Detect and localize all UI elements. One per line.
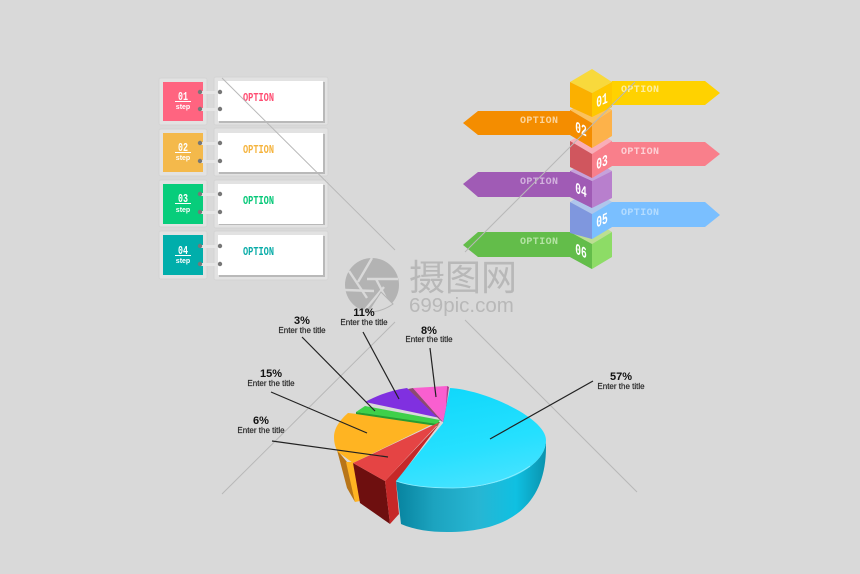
label: 57%: Enter the title: [597, 382, 645, 391]
option 02: [463, 98, 612, 148]
option 04: [463, 159, 612, 208]
step card 01: 01: [178, 90, 188, 104]
option 02: OPTION: [520, 116, 558, 127]
option 05: [570, 189, 720, 239]
watermark diagonal lines: [222, 78, 637, 494]
step card 03: step: [176, 207, 190, 214]
slice: orange 15%: [334, 413, 437, 502]
option 02: 02: [575, 119, 587, 141]
label: 57%: 57%: [610, 371, 632, 383]
leader lines: [271, 332, 593, 457]
step card 03: [159, 180, 328, 228]
3D pie chart: [334, 386, 546, 532]
slice: pink 8%: [413, 386, 449, 424]
label: 8%: Enter the title: [405, 335, 453, 344]
option 05: OPTION: [621, 208, 659, 219]
panel: isometric option stack: [463, 69, 720, 269]
label: 15%: Enter the title: [247, 379, 295, 388]
step card 04: [159, 231, 328, 280]
watermark aperture icon: [345, 258, 399, 312]
watermark chinese name: 摄图网: [409, 257, 517, 298]
step card 04: step: [176, 258, 190, 265]
label: 15%: [247, 368, 295, 388]
option 01: 01: [596, 90, 608, 112]
label: 8%: 8%: [421, 325, 437, 337]
option 03: [570, 129, 720, 178]
step card 01: OPTION: [243, 91, 274, 105]
step card 04: 04: [178, 244, 188, 258]
step card 01: [159, 77, 328, 125]
option 01: [570, 69, 720, 117]
label: 6%: 6%: [253, 415, 269, 427]
option 03: 03: [596, 152, 608, 174]
slice: green 3%: [356, 406, 440, 426]
label: 11%: [340, 307, 388, 327]
step card 02: 02: [178, 141, 188, 155]
slice: purple 11%: [365, 388, 443, 422]
label: 11%: 11%: [353, 307, 375, 319]
label: 3%: Enter the title: [278, 326, 326, 335]
step card 02: step: [176, 155, 190, 162]
step card 03: 03: [178, 192, 188, 206]
label: 3%: 3%: [294, 315, 310, 327]
option 04: 04: [575, 180, 587, 202]
panel: step cards: [159, 77, 328, 280]
step card 04: OPTION: [243, 245, 274, 259]
label: 6%: [237, 415, 285, 435]
watermark: [345, 257, 517, 317]
slice: cyan 57%: [396, 388, 546, 532]
watermark url: 699pic.com: [409, 294, 514, 317]
option 03: OPTION: [621, 147, 659, 158]
option 04: OPTION: [520, 177, 558, 188]
step card 01: step: [176, 104, 190, 111]
label: 6%: Enter the title: [237, 426, 285, 435]
step card 03: OPTION: [243, 194, 274, 208]
label: 8%: [405, 325, 453, 344]
option 06: OPTION: [520, 237, 558, 248]
step card 02: OPTION: [243, 143, 274, 157]
option 05: 05: [596, 210, 608, 232]
label: 15%: 15%: [260, 368, 282, 380]
option 01: OPTION: [621, 85, 659, 96]
slice: red 6%: [353, 422, 440, 524]
label: 11%: Enter the title: [340, 318, 388, 327]
label: 3%: [278, 315, 326, 335]
step card 02: [159, 128, 328, 176]
label: 57%: [597, 371, 645, 391]
option 06: [463, 219, 612, 269]
option 06: 06: [575, 241, 587, 263]
